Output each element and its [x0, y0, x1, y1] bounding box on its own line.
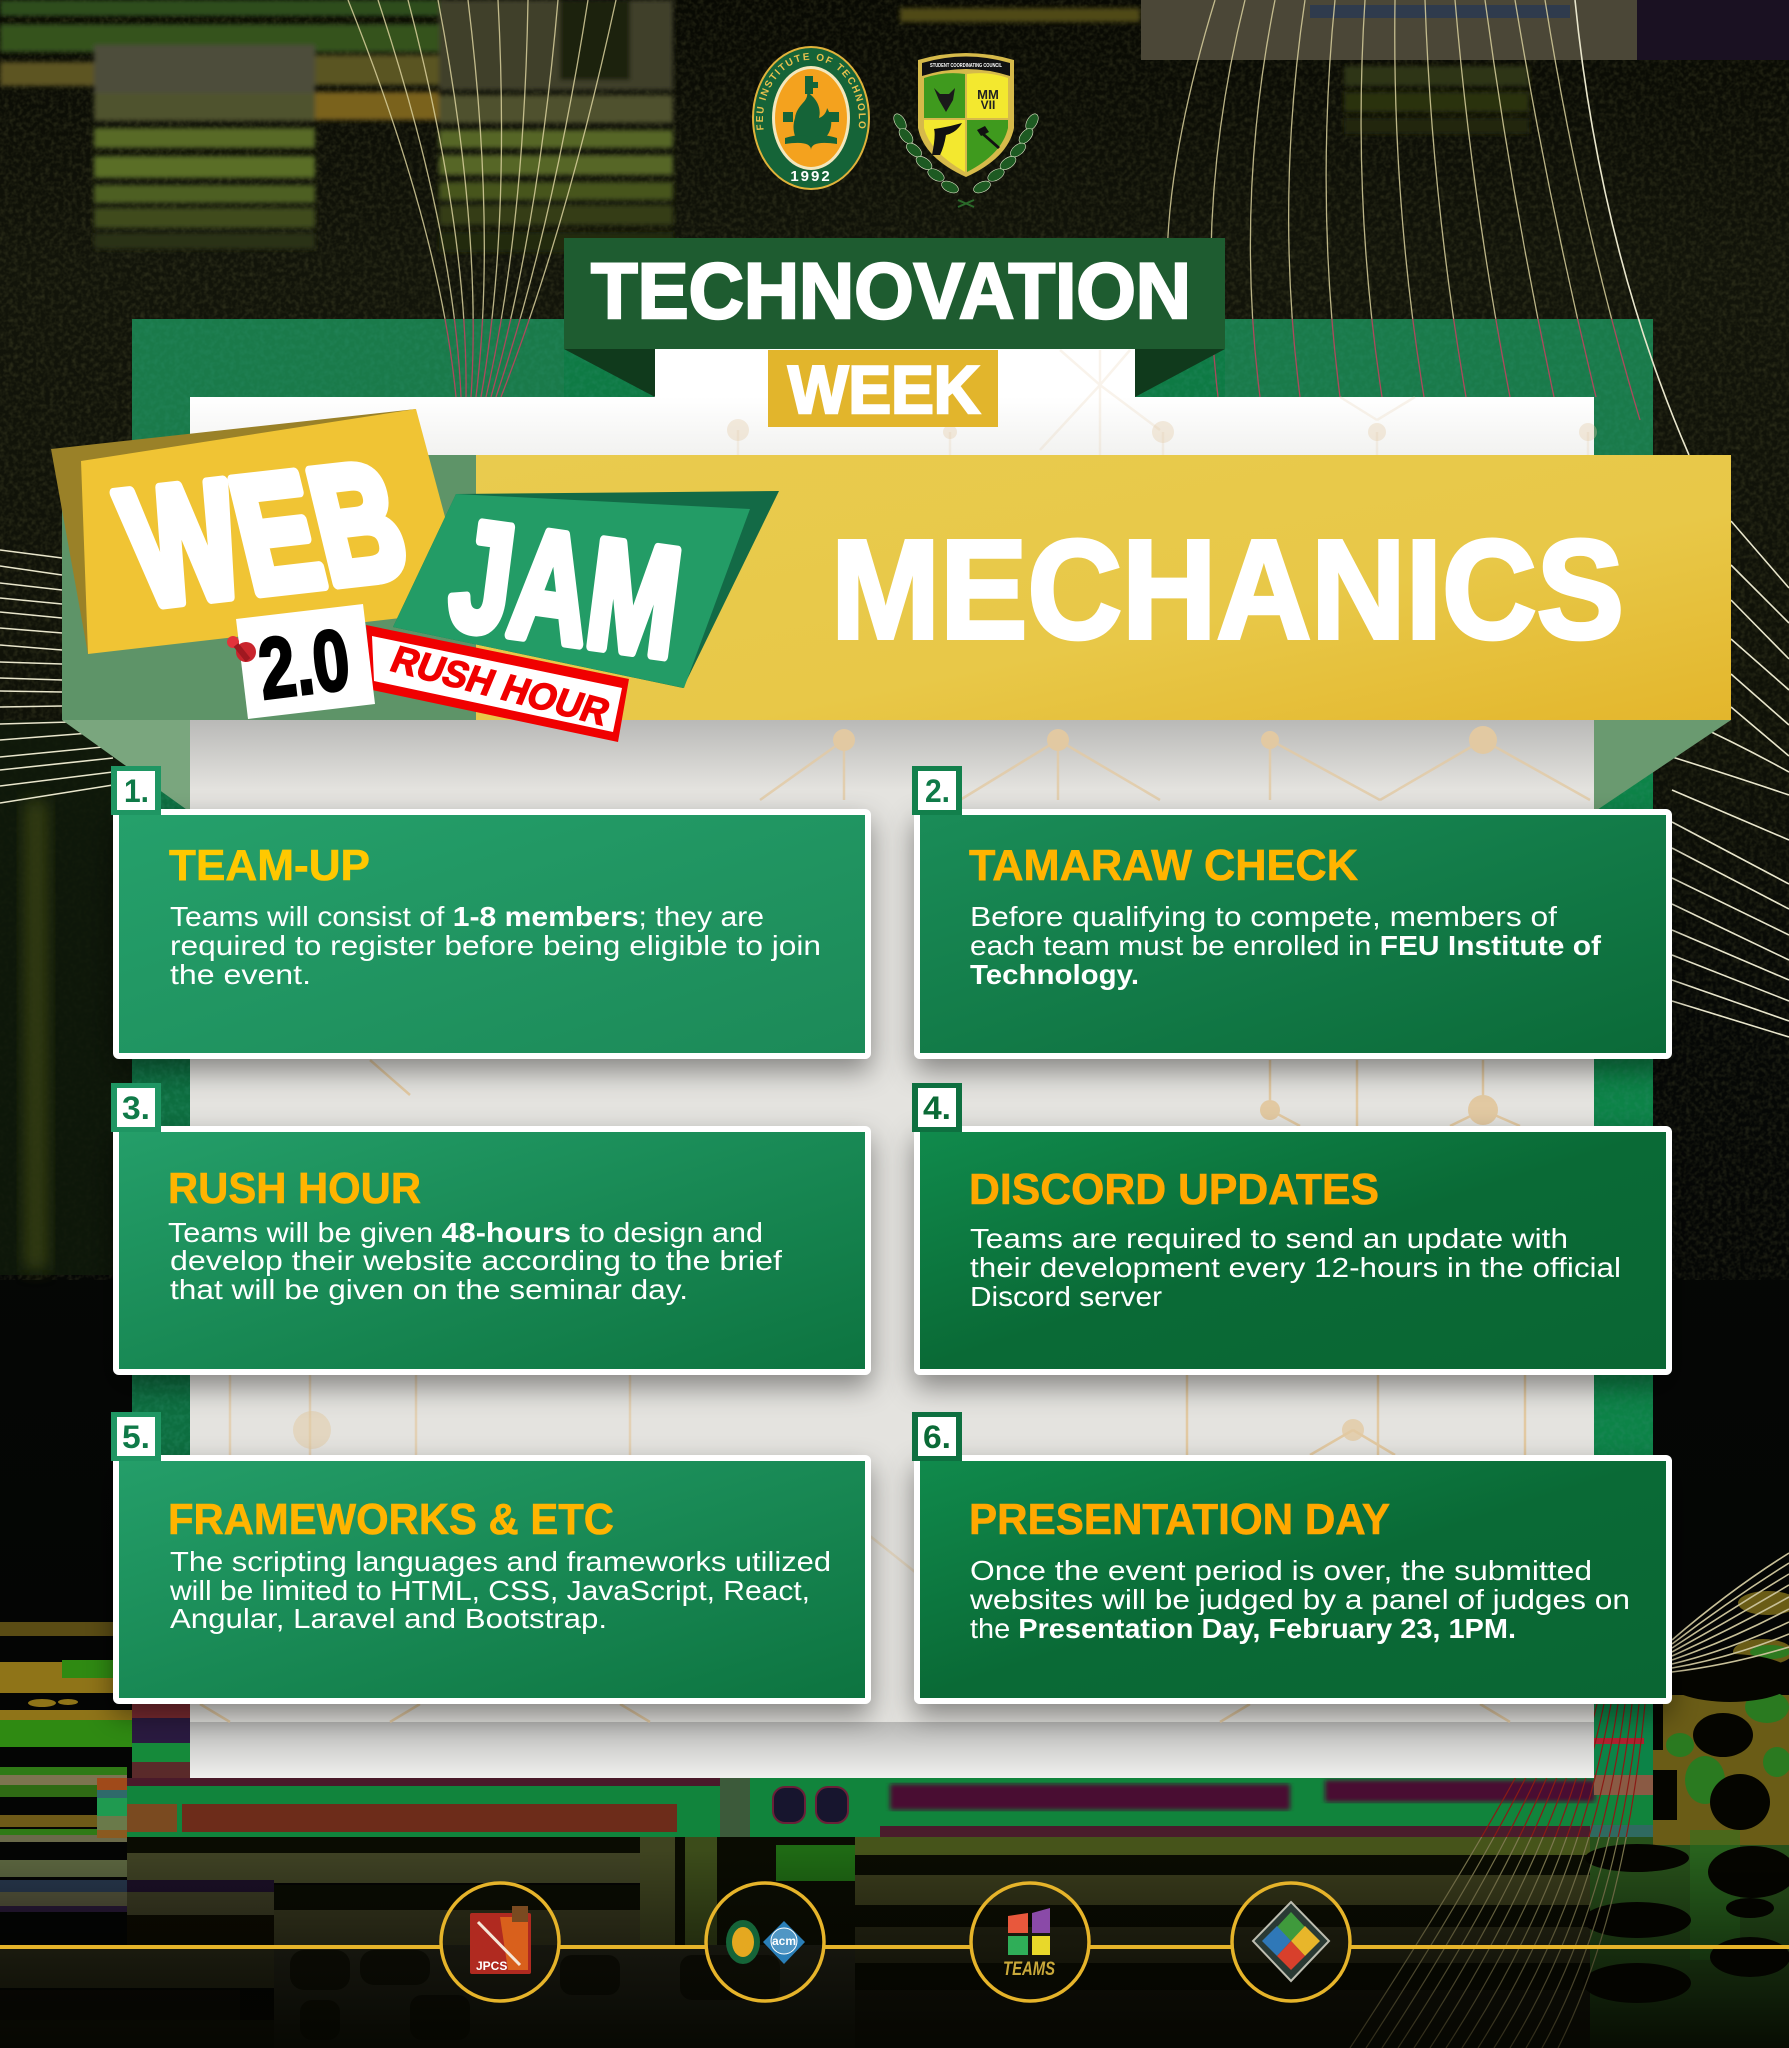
badge 3: 3.	[122, 1090, 150, 1126]
body: Teams will be given 48-hours to design and	[168, 1217, 763, 1248]
banner folds	[62, 720, 1731, 812]
version tag 2.0: 2.0	[254, 612, 355, 718]
body: the Presentation Day, February 23, 1PM.	[970, 1613, 1516, 1644]
badge 1	[111, 766, 161, 815]
heading: FRAMEWORKS & ETC	[168, 1495, 614, 1544]
rush hour tag: RUSH HOUR	[385, 638, 616, 734]
body: required to register before being eligible to join	[170, 930, 821, 961]
heading: TEAM-UP	[169, 841, 370, 890]
body: Technology.	[970, 959, 1139, 990]
body: Before qualifying to compete, members of	[970, 901, 1557, 932]
badge 2	[912, 766, 962, 815]
bottom stripes	[127, 1704, 1653, 1837]
title: Technovation: TECHNOVATION	[591, 246, 1191, 335]
panel: white sheet	[190, 349, 1597, 1778]
body: Once the event period is over, the submitted	[970, 1555, 1592, 1586]
bottom left stripes	[0, 1622, 274, 2048]
card 2	[912, 766, 1672, 1059]
body: Teams will consist of 1-8 members ; they are	[170, 901, 764, 932]
body	[970, 901, 1602, 990]
jam plate: JAM	[442, 487, 689, 690]
heading: TAMARAW CHECK	[969, 841, 1358, 890]
logo: student council shield	[891, 53, 1041, 207]
logo: student council shield: VII	[981, 98, 995, 112]
badge 6: 6.	[923, 1419, 951, 1455]
logo: Web Jam	[51, 409, 779, 742]
body: Teams are required to send an update with	[970, 1223, 1568, 1254]
body	[168, 1217, 782, 1305]
footer logo: JPCS	[441, 1883, 559, 2001]
footer logo: FEU ACM	[706, 1883, 824, 2001]
logo: FEU seal: 1992	[790, 168, 832, 185]
footer logo: FEU ACM: acm	[772, 1934, 796, 1948]
banner: Mechanics	[62, 455, 1731, 720]
icon: push pin	[227, 636, 256, 662]
badge 5: 5.	[122, 1419, 150, 1455]
heading: Mechanics: MECHANICS	[831, 510, 1624, 668]
body: websites will be judged by a panel of judges on	[969, 1584, 1630, 1615]
body: their development every 12-hours in the official	[970, 1252, 1621, 1283]
ribbon fold left	[564, 349, 655, 397]
logo: student council shield: STUDENT COORDINATING COUNCIL	[930, 63, 1002, 69]
card 1	[111, 766, 871, 1059]
hex pattern	[200, 350, 1590, 1722]
body: the event.	[170, 959, 311, 990]
heading: RUSH HOUR	[168, 1164, 421, 1213]
card 5	[111, 1412, 871, 1704]
badge 4	[912, 1083, 962, 1132]
badge 2: 2.	[925, 773, 950, 809]
body	[969, 1555, 1630, 1644]
body: that will be given on the seminar day.	[170, 1274, 688, 1305]
laurel	[891, 112, 1041, 195]
badge 5	[111, 1412, 161, 1461]
pill shapes	[773, 1787, 848, 1823]
ribbon fold right	[1135, 349, 1225, 397]
body: develop their website according to the brief	[170, 1245, 782, 1276]
card 3	[111, 1083, 871, 1375]
web plate	[51, 409, 470, 654]
footer logo: JPCS: JPCS	[476, 1959, 507, 1973]
body: each team must be enrolled in FEU Institute of	[970, 930, 1602, 961]
badge 4: 4.	[923, 1090, 951, 1126]
panel: green backdrop	[127, 319, 1653, 1837]
top line fans	[348, 0, 1640, 420]
shield	[918, 53, 1014, 177]
body: will be limited to HTML, CSS, JavaScript, React,	[169, 1575, 810, 1606]
bottom pipes	[127, 1837, 1590, 2048]
heading: PRESENTATION DAY	[969, 1495, 1390, 1544]
logo: student council shield: MM	[977, 87, 999, 102]
ribbon: Technovation	[564, 238, 1225, 397]
body: The scripting languages and frameworks utilized	[170, 1546, 831, 1577]
body: Angular, Laravel and Bootstrap.	[170, 1603, 607, 1634]
footer logo: Teams	[971, 1883, 1089, 2001]
footer logo: Teams: TEAMS	[1003, 1959, 1055, 1980]
logo: FEU seal	[752, 46, 870, 190]
right camouflage blotches	[1583, 1591, 1789, 2048]
web plate: WEB	[105, 427, 422, 641]
body: Discord server	[970, 1281, 1162, 1312]
card 6	[912, 1412, 1672, 1704]
card 4	[912, 1083, 1672, 1375]
side wave lines	[0, 0, 1789, 1037]
badge 6	[912, 1412, 962, 1461]
body	[970, 1223, 1621, 1312]
body	[170, 901, 821, 990]
box: Week: WEEK	[788, 352, 980, 428]
footer logo: diamond	[1232, 1883, 1350, 2001]
heading: DISCORD UPDATES	[969, 1165, 1379, 1214]
badge 3	[111, 1083, 161, 1132]
ribbon gap white	[654, 349, 1135, 397]
footer line	[0, 1945, 1789, 1949]
body	[169, 1546, 831, 1634]
bottom right line fans	[1350, 1553, 1789, 2048]
background fade	[0, 1850, 1789, 2048]
badge 1: 1.	[124, 773, 149, 809]
